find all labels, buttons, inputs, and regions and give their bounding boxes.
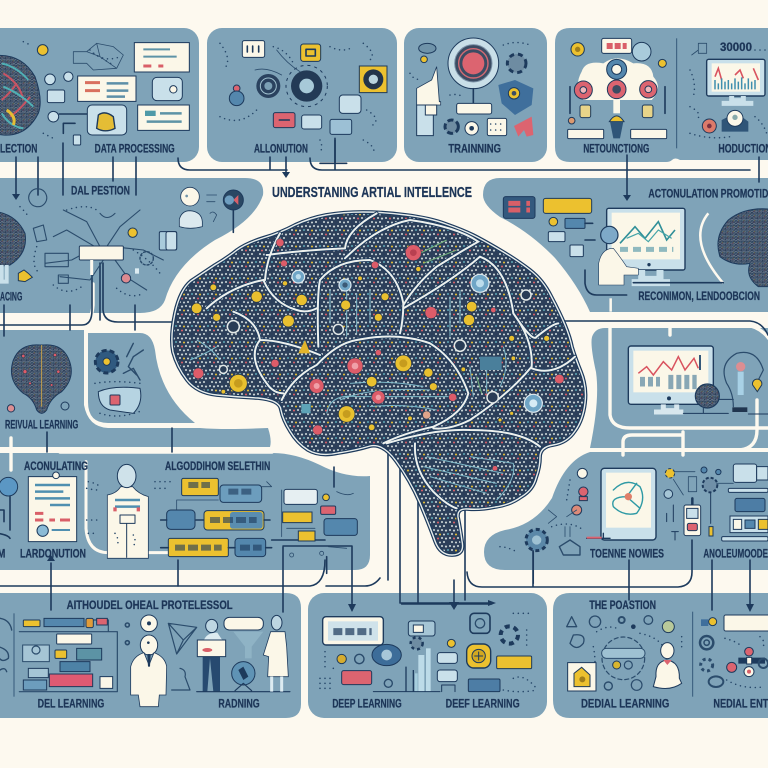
green traces (413, 240, 482, 393)
heading: title: UNDERSTANING ARTIAL INTELLENCE (272, 185, 472, 201)
icon: gear (501, 626, 518, 644)
icon: yellow bubble (752, 379, 762, 392)
icon: network cloud (602, 637, 645, 680)
icon: data chip (242, 41, 265, 57)
figure: doctor in white coat (131, 615, 167, 707)
icon: meditating person (653, 643, 682, 689)
label: neural learning: REIVUAL LEARNING (5, 419, 78, 432)
icon: tablet with network (587, 468, 656, 540)
icon: small coin (447, 639, 455, 647)
icon: gear cluster (507, 54, 526, 73)
icon: cloud network (570, 38, 666, 118)
button row three (161, 538, 325, 557)
divider (676, 38, 678, 148)
button row two (161, 510, 270, 530)
icon: small card (166, 232, 177, 250)
icon: left brain on stand (0, 212, 32, 282)
label: allocation: ALLONUTION (254, 142, 308, 155)
label: ethical protocol: AITHOUDEL OHEAL PROTELESSOL (67, 599, 233, 612)
brain inner rim (172, 212, 586, 555)
panel: deep learning (320, 604, 537, 710)
text box: data card three (138, 105, 189, 130)
icon: blue cube (498, 80, 533, 115)
panel: accumulating and algorithm selection (0, 460, 357, 573)
icon: red dots and pipes (548, 468, 602, 539)
chart: production monitor (707, 59, 765, 103)
icon: lens tile (359, 66, 387, 93)
gyri light core (207, 213, 575, 508)
panel: techniques and analysis (500, 464, 768, 583)
inset outline (86, 462, 200, 553)
text box: data card two (78, 76, 136, 101)
arrow: white arc (700, 213, 723, 283)
panel: upper left icons (166, 187, 243, 250)
network sketch (168, 623, 197, 690)
right node stack (282, 489, 357, 557)
icon: circuit cluster (664, 467, 733, 540)
connector hook (585, 270, 627, 295)
label: neural learning: DEDIAL LEARNING (581, 697, 669, 710)
icon: small chips (548, 217, 595, 257)
brain body outline (172, 212, 586, 555)
tag: small light buttons (437, 653, 457, 692)
brain nodes and gyri (190, 213, 575, 508)
icon: clipboard document (28, 472, 77, 542)
icon: yellow house tile (568, 663, 596, 691)
button: red (342, 671, 372, 685)
panel: dual position (0, 184, 177, 304)
label: running: RADNING (218, 697, 260, 710)
icon: head (181, 187, 199, 206)
label: deep learning left: DEL LEARNING (38, 697, 104, 710)
text box: training tag (457, 103, 492, 114)
icon: button tiles (273, 95, 361, 163)
label: score: 30000 (720, 41, 752, 54)
panel: training (410, 38, 533, 156)
icon: small symbols (567, 616, 682, 677)
label: selection: LECTION (0, 142, 37, 155)
brain colour traces (2, 63, 33, 128)
label: landing: LARDONUTION (20, 547, 86, 560)
icon: tower (417, 67, 441, 136)
panel: allocation (220, 41, 387, 163)
icon: target rings (448, 38, 499, 103)
label: dual position: DAL PESTION (71, 184, 130, 197)
icon: frontal brain (11, 345, 71, 413)
icon: small scattered icons (23, 42, 123, 145)
label: deep learning one: DEEP LEARNING (332, 697, 402, 710)
divider (13, 613, 15, 697)
icon: circuit brain left (0, 55, 40, 135)
icon: left gear fragment (0, 618, 12, 672)
icon: red dial (702, 119, 716, 133)
icon: phone device (684, 498, 701, 536)
red nodes (193, 239, 564, 471)
speech bubble (224, 617, 263, 630)
icon: gears (700, 636, 723, 687)
text box: left tag (568, 129, 604, 139)
gyri dark edge (207, 213, 575, 508)
button row one (155, 478, 272, 510)
panel: monitor and bulb (628, 346, 768, 414)
divider (692, 612, 694, 697)
icon: bust (179, 211, 202, 228)
button: dark blue bar (468, 679, 500, 692)
label: the position: THE POASTION (589, 599, 656, 612)
chart: red line monitor (628, 346, 713, 412)
icon: camera (722, 110, 748, 132)
panel: neural learning (5, 343, 200, 553)
icon: small ring (61, 402, 69, 410)
icon: person glyph (229, 85, 244, 106)
text box: right tag (631, 129, 667, 139)
icon: mini brain (683, 384, 733, 413)
cloud and coin icons (419, 43, 436, 63)
text box: center tag (79, 246, 123, 260)
icon: anchor tile (87, 105, 127, 135)
callout: screen (323, 617, 383, 645)
icon: gear (526, 529, 547, 583)
network diagram (20, 189, 177, 296)
button: yellow guide (543, 198, 592, 213)
label: processing: ACING (0, 291, 22, 304)
icon: sketch gear (411, 637, 423, 649)
icon: monitor tile (408, 621, 435, 636)
label: neural function: NETOUNCTIONG (583, 143, 649, 156)
icon: lower row (445, 117, 533, 137)
icon: person at desk (599, 226, 638, 285)
figure: woman in lab coat (263, 615, 288, 692)
icon: light bulb (724, 352, 768, 414)
inset: tile and red tag (98, 387, 141, 413)
panel: neural function and production (568, 38, 768, 156)
label: accumulating: ACONULATING (24, 460, 88, 473)
inset: gear and yellow core (95, 350, 118, 373)
icon: person figure (107, 464, 148, 558)
figure: presenter with board (197, 619, 226, 692)
inset: network (123, 343, 143, 380)
main circuit brain (172, 212, 586, 555)
dark connector lines and arrows (0, 140, 768, 612)
bar chart: small bars (373, 648, 440, 692)
icon: house (559, 540, 580, 555)
text box: right tag (724, 615, 768, 631)
icon: top arrow (402, 603, 492, 605)
label: deep learning two: DEEF LEARNING (446, 697, 520, 710)
icon: blue eye (372, 644, 401, 666)
icon: yellow tile (301, 44, 321, 61)
panel: the position and neural learning (567, 599, 768, 710)
arrow: dark pointer (633, 282, 723, 284)
panel: selection and data processing (0, 42, 189, 156)
icon: central network (727, 647, 768, 677)
panel: automation and recognition (503, 187, 768, 312)
label: data processing: DATA PROCESSING (95, 143, 175, 156)
circuit traces (190, 287, 514, 500)
chart: growth monitor (607, 208, 685, 283)
white connector paths (0, 284, 768, 470)
icon: small flag (701, 618, 717, 626)
icon: blue sphere (0, 477, 18, 538)
icon: head with helmet (609, 116, 624, 138)
icon: coins (337, 654, 364, 664)
icon: padlock (692, 43, 707, 55)
label: techniques: TOENNE NOWIES (590, 547, 664, 560)
yellow nodes (191, 266, 550, 431)
text box: data card one (134, 43, 189, 72)
chart: module stack (19, 618, 117, 692)
scattered dots (220, 43, 376, 155)
icon: right machine (722, 464, 768, 541)
icon: cone and fan (197, 632, 290, 692)
icon: square chip (470, 613, 490, 633)
icon: control box (503, 197, 535, 218)
button: yellow (497, 656, 532, 669)
icon: big yellow badge (467, 644, 491, 668)
icon: small flower (7, 405, 15, 412)
label: algorithm selection: ALGODDIHOM SELETHIN (165, 460, 270, 473)
icon: twin gears (255, 50, 327, 107)
icon: second brain (718, 209, 768, 287)
label: training: TRAINNING (448, 143, 501, 156)
icon: database card (152, 77, 182, 101)
white and dark stem lines (90, 260, 93, 275)
panel: ethical protocol and people (0, 599, 290, 710)
icon: dial on stem (223, 190, 243, 232)
blue and white ring nodes (219, 270, 542, 413)
